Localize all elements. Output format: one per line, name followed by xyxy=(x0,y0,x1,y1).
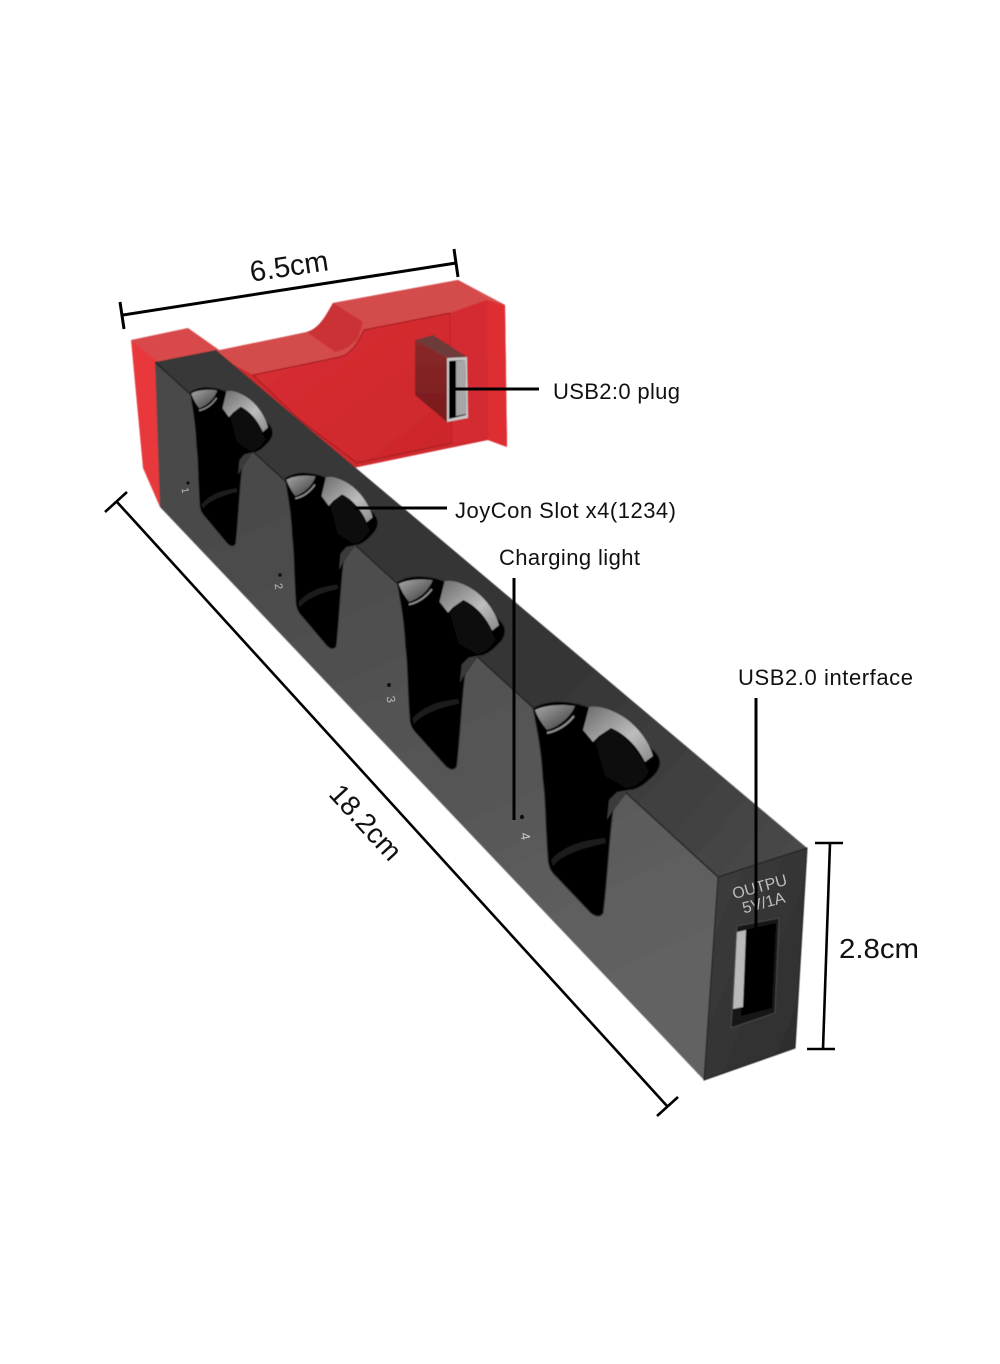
JoyCon slot 4 xyxy=(533,702,660,916)
callout: charging light: Charging light xyxy=(499,545,640,570)
dock edge highlight xyxy=(155,362,718,877)
slot number 1 and light: 1 xyxy=(179,487,190,495)
dimension: 18.2cm xyxy=(105,492,678,1116)
dock top face xyxy=(155,350,807,877)
charging dock product xyxy=(131,280,807,1080)
callout: USB2.0 interface: USB2.0 interface xyxy=(738,665,913,690)
dimension: 18.2cm: 18.2cm xyxy=(323,778,408,867)
output label: 5V/1A xyxy=(741,890,787,917)
slot number 1 and light xyxy=(179,481,190,495)
slot number 2 and light: 2 xyxy=(272,582,284,591)
JoyCon slot 3 xyxy=(397,576,505,769)
red end block xyxy=(131,328,222,507)
dimension: 6.5cm xyxy=(120,245,458,329)
JoyCon slot 2 xyxy=(285,473,378,649)
slot number 4 and light: 4 xyxy=(517,831,533,841)
slot number 3 and light: 3 xyxy=(383,695,398,704)
dock front face xyxy=(704,848,807,1080)
red stand arm xyxy=(205,280,507,468)
callout: USB2:0 plug: USB2:0 plug xyxy=(553,379,680,404)
output label xyxy=(731,872,789,917)
USB2.0 plug xyxy=(415,335,468,422)
dimension: 2.8cm: 2.8cm xyxy=(839,933,919,964)
slot number 3 and light xyxy=(383,683,398,704)
USB output port xyxy=(731,918,779,1028)
dimension: 2.8cm xyxy=(807,843,919,1049)
output label: OUTPU xyxy=(731,872,789,903)
slot number 4 and light xyxy=(517,815,533,841)
callout: JoyCon slot: JoyCon Slot x4(1234) xyxy=(455,498,676,523)
JoyCon slot 1 xyxy=(190,387,273,546)
slot number 2 and light xyxy=(272,573,284,591)
dimension: 6.5cm: 6.5cm xyxy=(248,245,331,289)
dock side face xyxy=(155,362,718,1080)
